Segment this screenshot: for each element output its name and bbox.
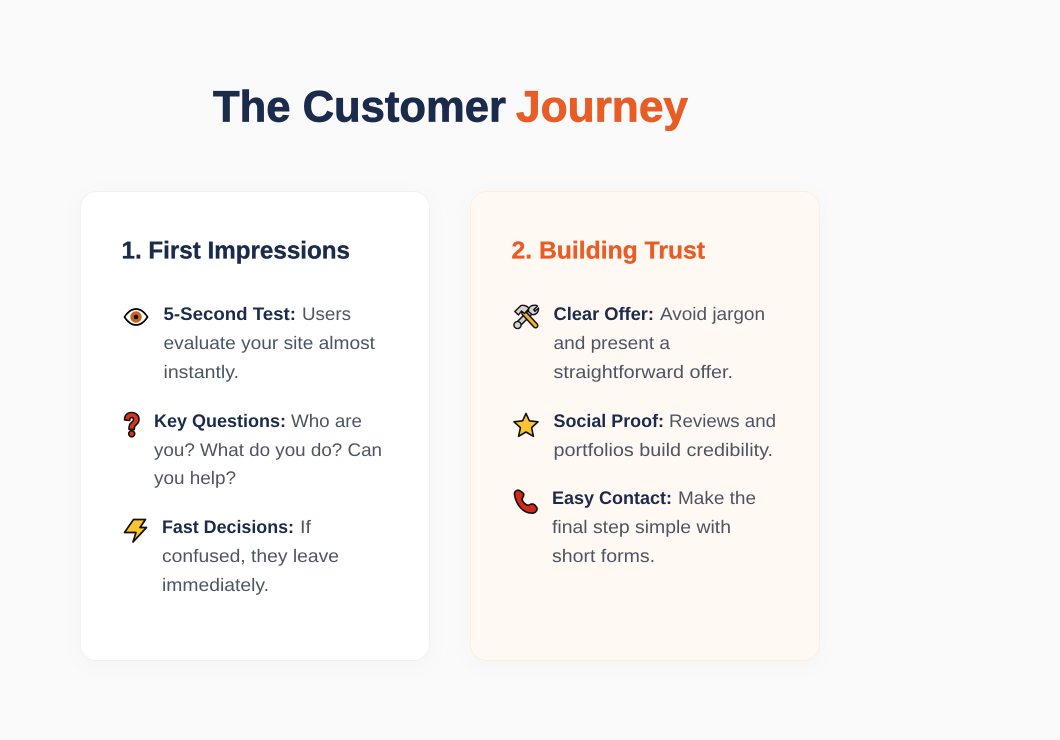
- card background: first impressions: [80, 192, 430, 660]
- text: easy contact: Make the: [678, 488, 756, 508]
- icon: eye: [124, 309, 148, 325]
- text: social proof: Reviews and: [669, 411, 776, 431]
- text: fast decisions: Fast Decisions:: [162, 517, 294, 537]
- text: fast decisions: [162, 517, 339, 595]
- text: clear offer: Clear Offer:: [554, 304, 654, 324]
- text: key questions: you help?: [154, 468, 236, 488]
- text: clear offer: straightforward offer.: [554, 362, 733, 382]
- icon: lightning bolt: [124, 520, 146, 542]
- text: clear offer: and present a: [554, 333, 671, 353]
- text: social proof: Social Proof:: [554, 411, 664, 431]
- item: fast decisions: [124, 517, 339, 595]
- text: 5-second test: 5-Second Test:: [164, 304, 296, 324]
- text: easy contact: [552, 488, 756, 566]
- item: clear offer: [514, 304, 765, 382]
- text: easy contact: short forms.: [552, 546, 655, 566]
- text: key questions: Who are: [291, 411, 362, 431]
- item: social proof: [514, 411, 776, 460]
- text: social proof: portfolios build credibility.: [554, 440, 773, 460]
- text: 5-second test: [164, 304, 375, 382]
- heading: first impressions: 1. First Impressions: [122, 238, 350, 264]
- item: easy contact: [514, 488, 756, 566]
- icon: hammer and wrench: [514, 305, 539, 329]
- text: 5-second test: instantly.: [164, 362, 239, 382]
- title: Journey: [516, 82, 689, 132]
- text: key questions: [154, 411, 382, 488]
- panel: building trust: [470, 192, 820, 660]
- text: fast decisions: If: [300, 517, 312, 537]
- text: easy contact: final step simple with: [552, 517, 731, 537]
- title: The Customer: [213, 82, 506, 132]
- item: key questions: [124, 411, 382, 488]
- icon: star: [514, 414, 538, 436]
- title: [213, 82, 689, 132]
- text: key questions: Key Questions:: [154, 411, 286, 431]
- text: clear offer: Avoid jargon: [660, 304, 765, 324]
- item: 5-second test: [124, 304, 375, 382]
- card background: building trust: [470, 192, 820, 660]
- icon: question mark: [124, 412, 139, 437]
- panel: first impressions: [80, 192, 430, 660]
- text: fast decisions: immediately.: [162, 575, 269, 595]
- text: social proof: [554, 411, 776, 460]
- text: key questions: you? What do you do? Can: [154, 440, 382, 460]
- text: fast decisions: confused, they leave: [162, 546, 339, 566]
- icon: telephone handset: [514, 490, 537, 513]
- text: 5-second test: Users: [302, 304, 351, 324]
- heading: building trust: 2. Building Trust: [512, 238, 705, 264]
- text: easy contact: Easy Contact:: [552, 488, 672, 508]
- text: clear offer: [554, 304, 765, 382]
- text: 5-second test: evaluate your site almost: [164, 333, 375, 353]
